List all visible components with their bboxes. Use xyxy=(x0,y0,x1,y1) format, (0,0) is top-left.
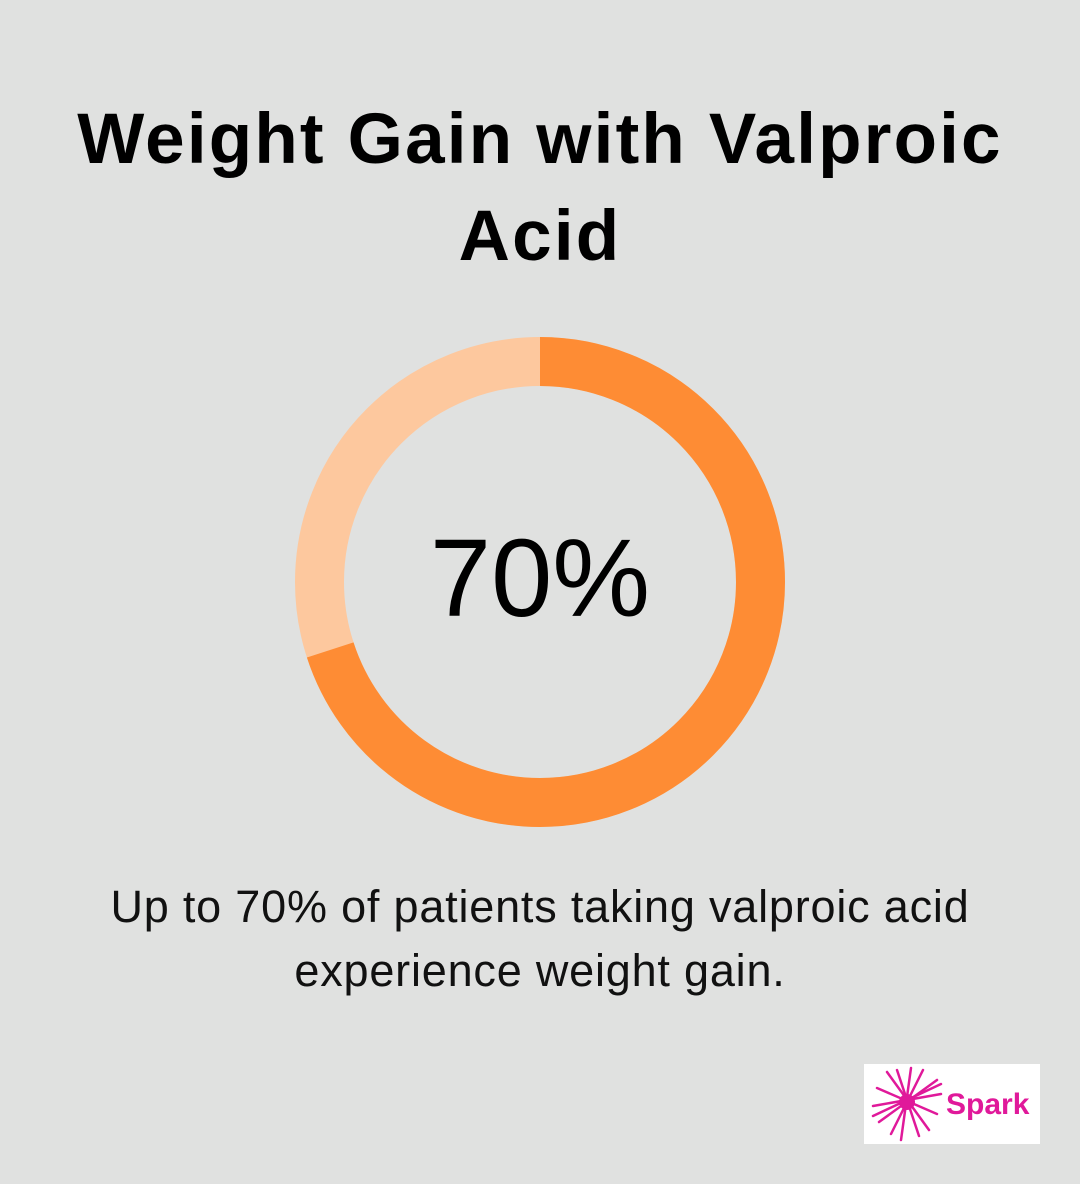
logo: Spark xyxy=(864,1064,1040,1144)
description: Up to 70% of patients taking valproic acid xyxy=(110,881,970,932)
logo: Spark: Spark xyxy=(946,1088,1030,1121)
description: experience weight gain. xyxy=(294,945,786,996)
title: Weight Gain with Valproic xyxy=(77,100,1003,179)
title xyxy=(77,100,1003,276)
title: Acid xyxy=(459,197,621,276)
donut chart: 70% xyxy=(430,517,650,640)
description xyxy=(110,881,970,996)
